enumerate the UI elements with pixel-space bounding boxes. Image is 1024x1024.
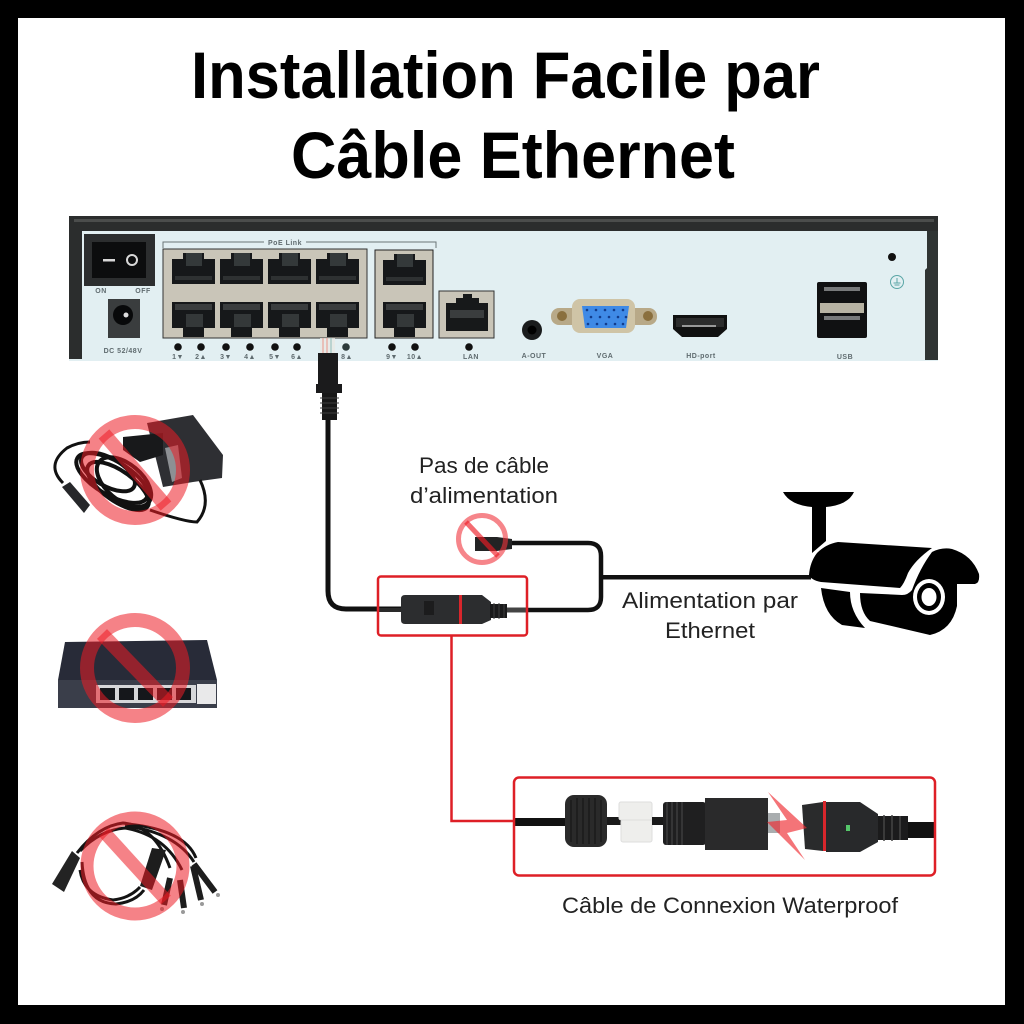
label: power over ethernet	[622, 588, 799, 643]
USB ports	[817, 282, 867, 361]
red lightning arrow	[767, 792, 807, 860]
panel: waterproof connector	[514, 778, 935, 876]
connector parts	[565, 795, 934, 852]
black ethernet cable from NVR	[328, 415, 405, 609]
audio out jack: A-OUT	[522, 353, 547, 360]
port LEDs and numbers: 9▼	[386, 354, 398, 361]
connector cable	[514, 818, 566, 826]
PoE Link bracket: PoE Link	[268, 240, 302, 247]
DC power jack: DC 52/48V	[104, 348, 142, 355]
port LEDs and numbers: 1▼	[172, 354, 184, 361]
port LEDs and numbers	[172, 343, 479, 361]
port LEDs and numbers: 2▲	[195, 354, 207, 361]
port LEDs and numbers: 4▲	[244, 354, 256, 361]
prohibition sign	[87, 620, 183, 716]
ethernet ports 9-10	[375, 250, 433, 338]
red leader line	[452, 636, 514, 821]
splitter photo	[52, 823, 220, 914]
label: power over ethernet: Alimentation par	[622, 588, 799, 613]
port LEDs and numbers: 5▼	[269, 354, 281, 361]
port LEDs and numbers: 10▲	[407, 354, 423, 361]
label: power over ethernet: Ethernet	[665, 618, 756, 643]
DC power jack	[104, 299, 142, 355]
switch photo	[58, 640, 217, 708]
VGA port: VGA	[597, 353, 613, 360]
USB ports: USB	[837, 354, 853, 361]
title: Installation Facile par	[191, 38, 820, 112]
ethernet ports 1-8	[163, 249, 367, 338]
port LEDs and numbers: 3▼	[220, 354, 232, 361]
power switch	[84, 234, 155, 295]
icon: DC splitter cable prohibited	[52, 818, 220, 914]
prohibition sign	[87, 818, 183, 914]
prohibition sign	[87, 422, 183, 518]
main PoE connector	[377, 595, 527, 624]
cable to camera	[601, 575, 811, 580]
adapter photo	[55, 415, 223, 522]
label: no power cable: Pas de câble	[419, 453, 549, 478]
port LEDs and numbers: 8▲	[341, 354, 353, 361]
audio out jack	[522, 320, 547, 360]
HDMI port: HD-port	[686, 353, 716, 360]
port LEDs and numbers: 6▲	[291, 354, 303, 361]
power switch: ON	[95, 288, 107, 295]
black power cable to camera	[505, 543, 601, 610]
icon: power adapter prohibited	[55, 415, 223, 522]
HDMI port	[673, 315, 727, 360]
port LEDs and numbers: LAN	[463, 354, 479, 361]
icon: bullet camera	[783, 492, 979, 635]
power switch: OFF	[135, 288, 151, 295]
panel: NVR rear view	[69, 216, 938, 361]
icon: PoE switch prohibited	[58, 620, 217, 716]
label: no power cable: d’alimentation	[410, 483, 558, 508]
PoE Link bracket	[163, 240, 436, 248]
red highlight box	[514, 778, 935, 876]
ground hole and symbol	[888, 253, 904, 288]
caption: waterproof cable: Câble de Connexion Waterproof	[562, 893, 899, 918]
label: no power cable	[410, 453, 558, 508]
LAN port	[439, 291, 494, 338]
RJ45 plug	[316, 338, 342, 420]
red highlight box around connector	[378, 576, 527, 636]
title: Câble Ethernet	[291, 118, 735, 192]
icon: power plug prohibited	[458, 516, 512, 562]
title	[191, 38, 820, 192]
VGA port	[551, 299, 657, 360]
